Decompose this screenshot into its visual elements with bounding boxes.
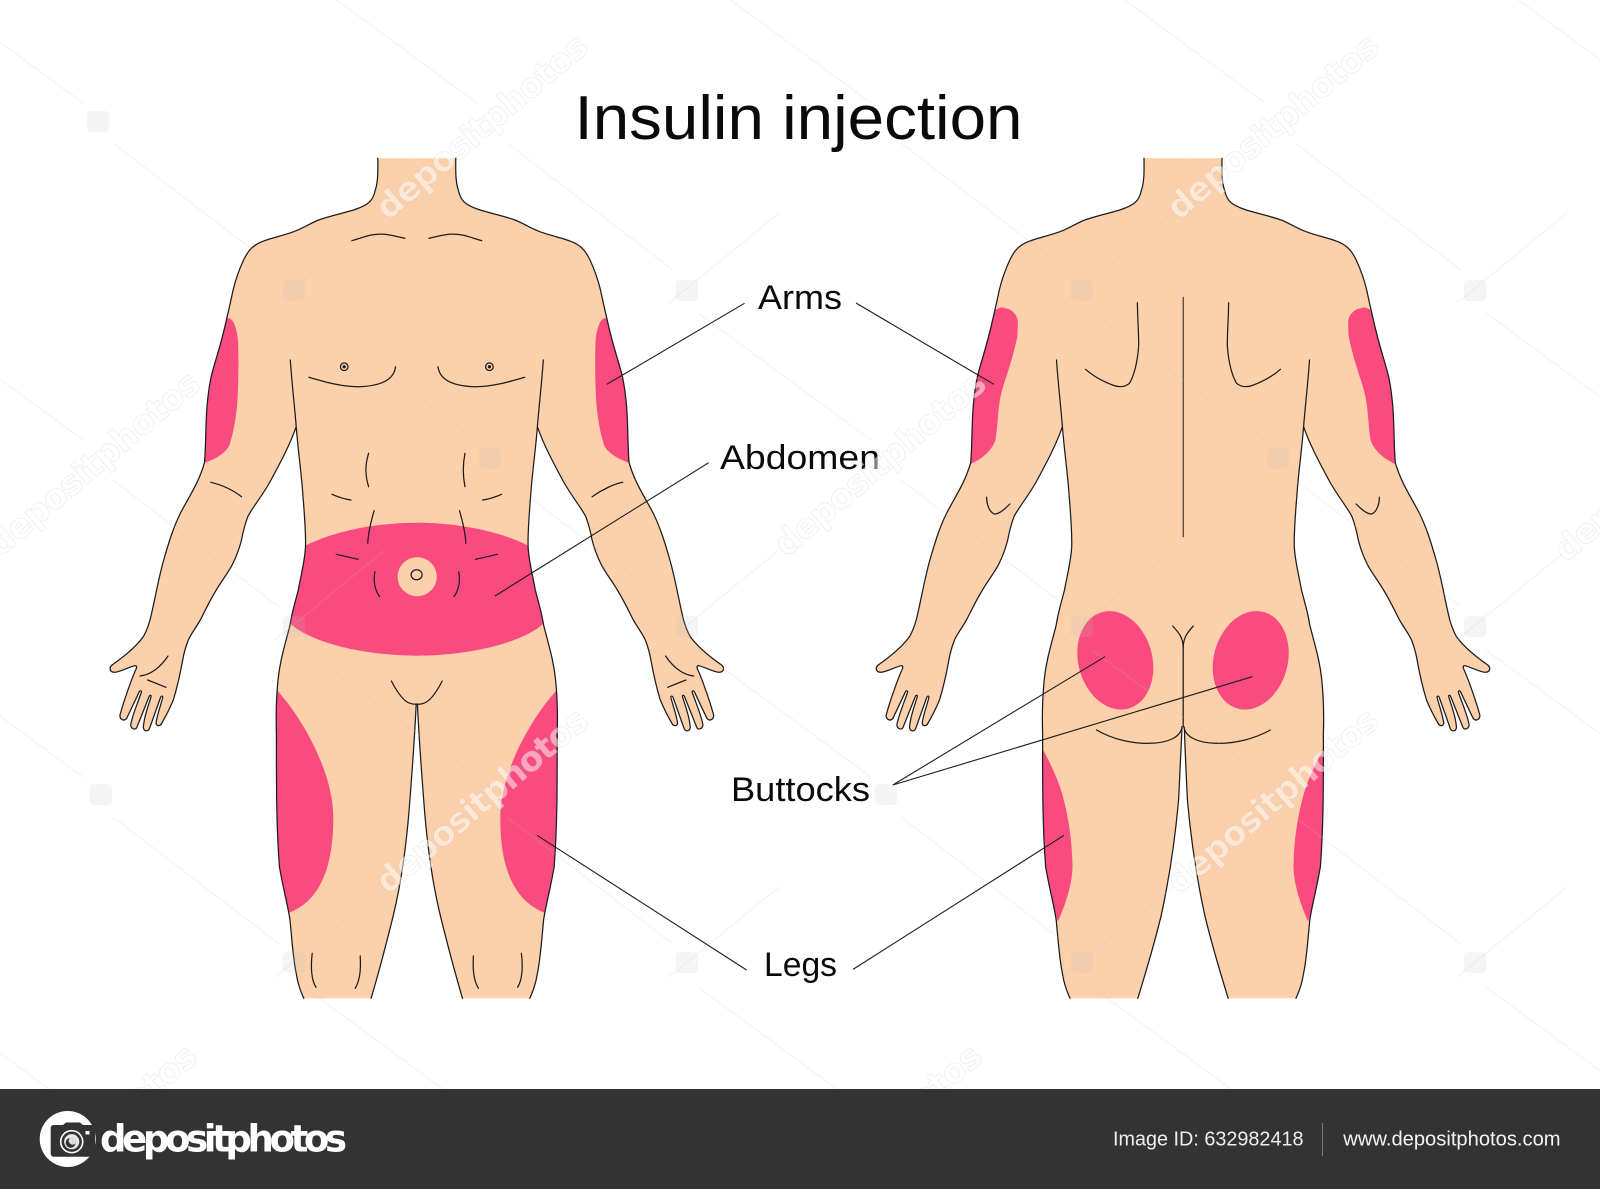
watermark overlay: depositphotos (368, 700, 596, 902)
watermark overlay: depositphotos (766, 363, 994, 565)
logo wordmark: depositphotos (100, 1118, 347, 1161)
title: Insulin injection (574, 84, 1022, 153)
front body figure (110, 158, 724, 998)
back body skin (876, 158, 1490, 998)
front body skin (110, 158, 724, 998)
watermark overlay: depositphotos (368, 26, 596, 228)
leader line: abdomen (495, 463, 709, 596)
front leg injection zones (276, 691, 557, 913)
back body outline (876, 158, 1490, 998)
label: Legs: Legs (764, 946, 837, 984)
back arm injection zones (970, 307, 1396, 464)
image id: Image ID: 632982418 (1113, 1128, 1304, 1150)
label: Buttocks: Buttocks (731, 771, 870, 809)
mirrored front detail lines (429, 234, 694, 988)
front arm injection zones (204, 318, 629, 463)
back leg injection zones (1043, 750, 1323, 922)
label: Abdomen: Abdomen (720, 439, 880, 477)
footer divider (1322, 1123, 1323, 1156)
leader lines: legs (537, 835, 1064, 970)
watermark overlay: depositphotos (1159, 700, 1387, 902)
navel skin circle (398, 557, 437, 596)
front body outline (110, 158, 724, 998)
website url: www.depositphotos.com (1342, 1128, 1561, 1150)
abdomen injection zone (290, 523, 543, 656)
leader lines: arms (607, 303, 994, 384)
leader lines: buttocks (893, 657, 1252, 785)
label: Arms: Arms (758, 279, 842, 317)
front anatomical detail lines (140, 234, 442, 988)
buttock injection zones (1067, 602, 1299, 718)
navel ring (411, 570, 422, 580)
back anatomical detail lines (987, 297, 1379, 743)
back body figure (876, 158, 1490, 998)
footer bar (0, 1089, 1600, 1189)
logo icon: camera in circle (40, 1111, 96, 1167)
watermark overlay: depositphotos (1159, 26, 1387, 228)
